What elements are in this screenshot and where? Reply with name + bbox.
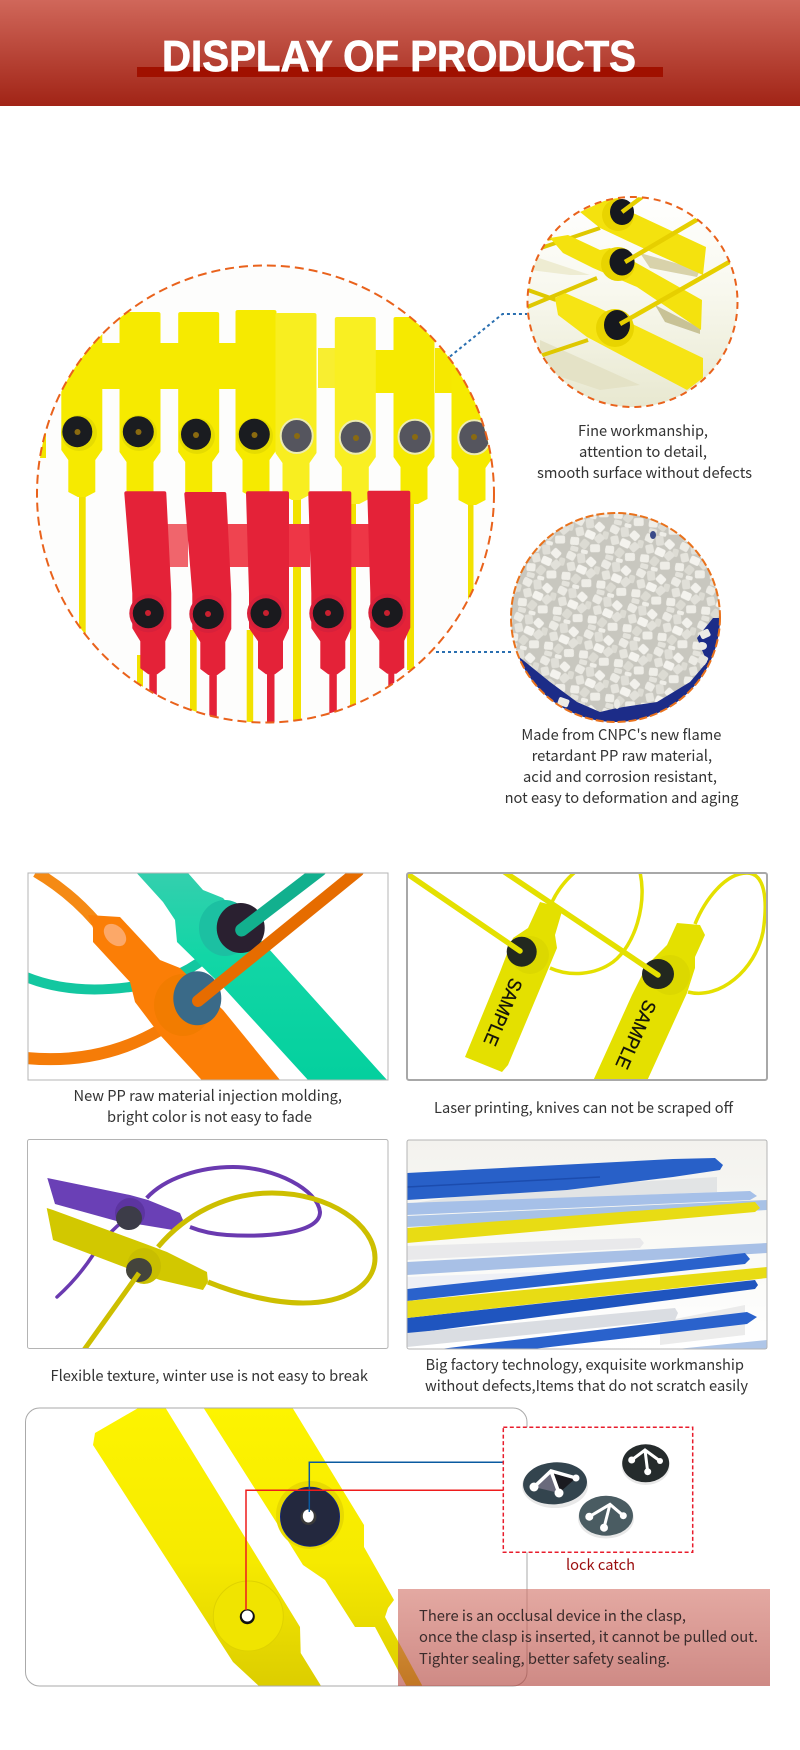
caption: workmanship: Fine workmanship, (578, 420, 708, 441)
caption: flexible texture: Flexible texture, winter use is not easy to break (50, 1365, 369, 1386)
label: lock catch: lock catch (566, 1554, 635, 1575)
caption: material (505, 724, 739, 808)
panel: blue, yellow and white rods (407, 1140, 767, 1349)
detail circle photo: workmanship (525, 195, 738, 407)
callout: sealing description: There is an occlusal device in the clasp, (419, 1605, 686, 1626)
callout: sealing description (398, 1589, 770, 1686)
caption: factory technology (425, 1354, 748, 1396)
right tag with seal (203, 1407, 423, 1687)
caption: material: not easy to deformation and aging (505, 787, 739, 808)
left tag with hole (93, 1407, 322, 1687)
tag text: SAMPLE: SAMPLE (479, 975, 526, 1049)
panel: lock close-up (26, 1407, 527, 1687)
connector: detail circle to main circle (450, 314, 527, 356)
icon: washer (522, 1460, 588, 1508)
connector: material circle to main circle (436, 651, 513, 653)
caption: injection molding: bright color is not easy to fade (107, 1106, 312, 1127)
caption: material: Made from CNPC's new flame (521, 724, 721, 745)
caption: material: retardant PP raw material, (532, 745, 712, 766)
header banner (0, 0, 800, 106)
callout: sealing description: once the clasp is inserted, it cannot be pulled out. (419, 1626, 758, 1647)
icon: washer (578, 1496, 634, 1538)
title: DISPLAY OF PRODUCTS (162, 32, 636, 81)
panel: SAMPLE laser printed seals (406, 871, 767, 1081)
panel: purple and yellow seals (28, 1140, 388, 1350)
caption: material: acid and corrosion resistant, (523, 766, 717, 787)
main circle photo: yellow and red seals (30, 266, 494, 730)
tag text: SAMPLE: SAMPLE (611, 997, 659, 1072)
callout line: red to hole (246, 1490, 503, 1610)
callout line: blue to seal (309, 1462, 503, 1512)
caption: injection molding: New PP raw material injection molding, (74, 1085, 342, 1106)
caption: injection molding (74, 1085, 342, 1127)
lock catch inset (503, 1427, 693, 1552)
icon: washer (622, 1444, 670, 1485)
caption: workmanship: smooth surface without defects (537, 462, 752, 483)
callout: sealing description: Tighter sealing, better safety sealing. (419, 1648, 670, 1669)
material circle photo: PP pellets (511, 513, 725, 725)
caption: factory technology: Big factory technology, exquisite workmanship (426, 1354, 744, 1375)
caption: workmanship (537, 420, 752, 483)
caption: workmanship: attention to detail, (579, 441, 707, 462)
caption: factory technology: without defects,Items that do not scratch easily (425, 1375, 748, 1396)
panel: orange and green seals (26, 870, 388, 1080)
caption: laser printing: Laser printing, knives can not be scraped off (434, 1097, 734, 1118)
